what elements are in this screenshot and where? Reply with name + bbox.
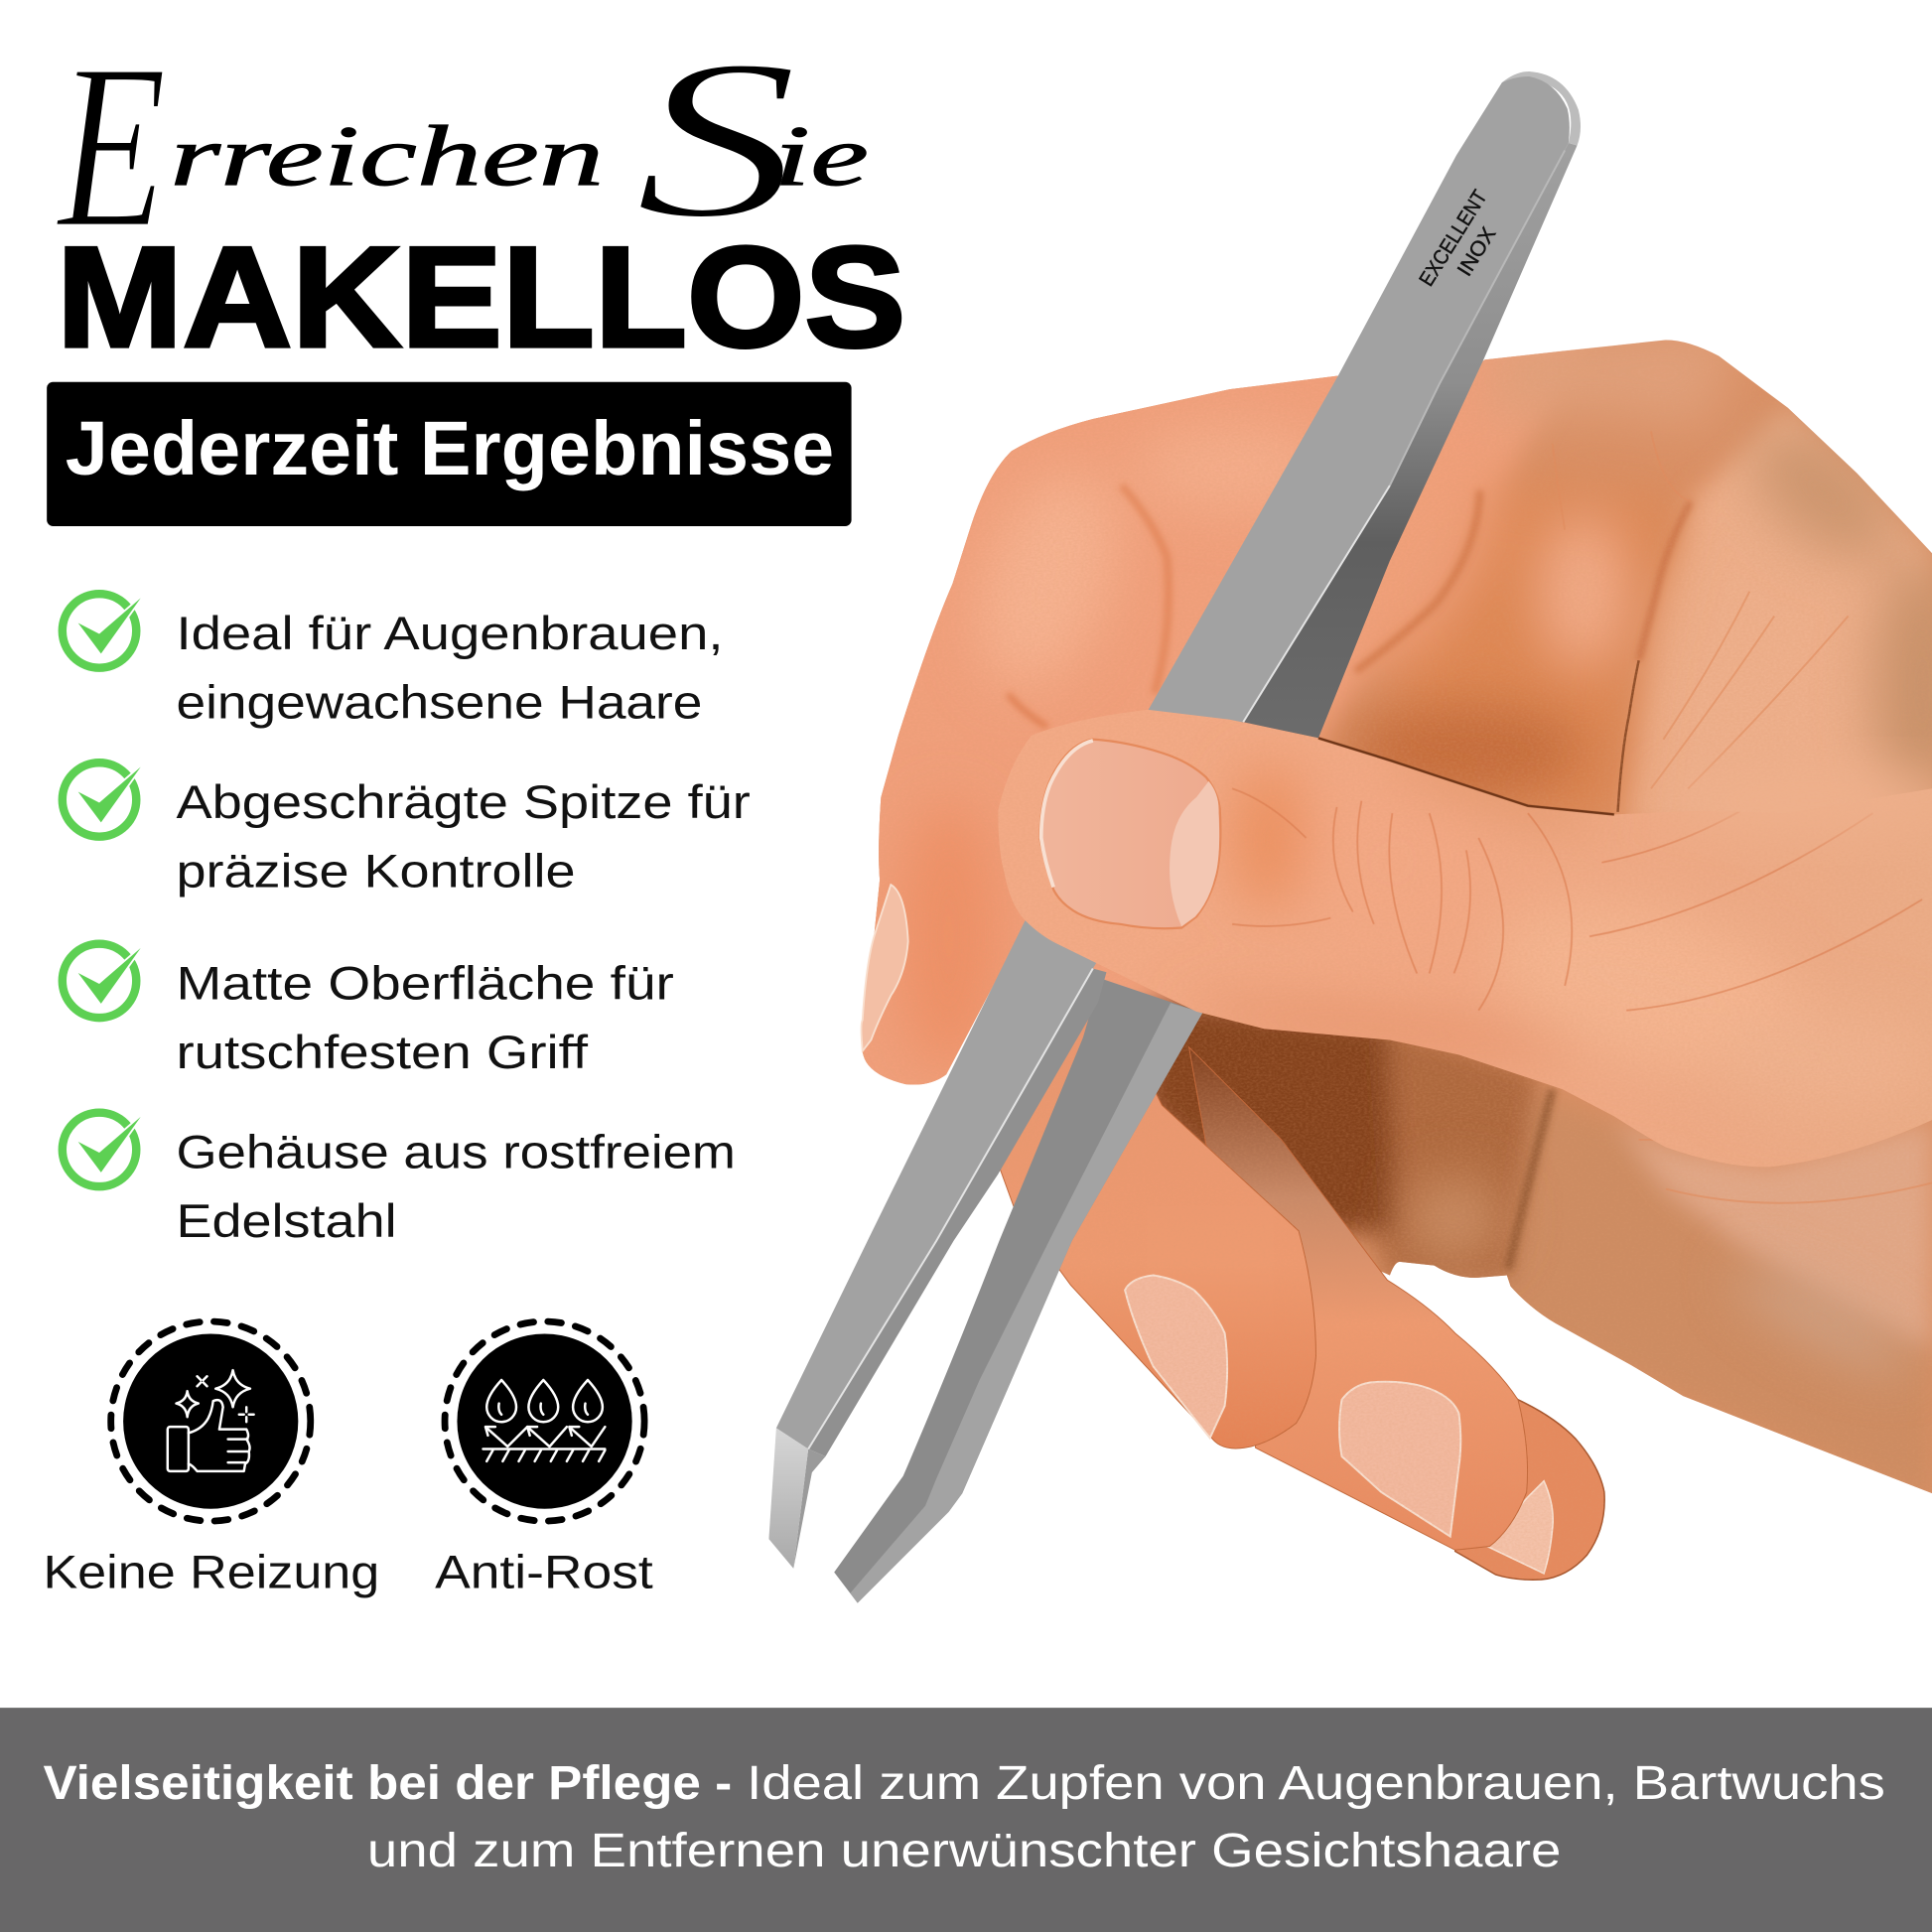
thumb upper shadow line <box>1318 738 1614 814</box>
icon: check <box>63 762 141 837</box>
label: Keine Reizung <box>43 1546 379 1598</box>
engraving: INOX <box>1453 223 1500 280</box>
banner: Jederzeit Ergebnisse: Jederzeit Ergebnisse <box>66 406 834 491</box>
icon: check <box>63 1113 141 1186</box>
title: script line <box>56 12 869 277</box>
pinky finger <box>1455 1361 1604 1580</box>
title: MAKELLOS: MAKELLOS <box>57 217 905 377</box>
footer band: Ideal zum Zupfen von Augenbrauen, Bartwuchs <box>747 1756 1885 1810</box>
middle nail <box>1125 1276 1227 1438</box>
icon: check <box>63 944 141 1018</box>
icon: index fingernail <box>862 885 908 1051</box>
bullet 4: Edelstahl <box>176 1194 397 1247</box>
icon: check <box>63 594 141 668</box>
ring nail <box>1339 1382 1460 1537</box>
title: script line: rreichen <box>170 108 604 204</box>
tweezer upper arm <box>768 71 1581 1569</box>
bullet 2: Abgeschrägte Spitze für <box>176 775 751 828</box>
footer band: und zum Entfernen unerwünschter Gesichtshaare <box>367 1824 1561 1877</box>
banner: Jederzeit Ergebnisse <box>47 382 852 526</box>
engraving: EXCELLENT <box>1415 187 1492 290</box>
bullet 2 <box>63 762 751 897</box>
badge: Keine Reizung <box>43 1321 379 1598</box>
footer band <box>0 1708 1932 1932</box>
photo: thumb <box>986 690 1932 1182</box>
bullet 3 <box>63 944 674 1078</box>
icon: thumbs up with sparkles <box>168 1370 254 1471</box>
bullet 3: rutschfesten Griff <box>176 1026 589 1078</box>
bullet 4: Gehäuse aus rostfreiem <box>176 1126 736 1178</box>
tweezers <box>768 71 1581 1603</box>
bullet 1: Ideal für Augenbrauen, <box>176 607 724 659</box>
bullet list <box>63 594 751 1247</box>
middle finger <box>1000 986 1315 1449</box>
badge: Anti-Rost <box>435 1321 653 1598</box>
tweezer lower arm <box>834 978 1202 1603</box>
title: script line: E <box>56 15 167 277</box>
thumb web blend <box>1663 768 1932 833</box>
bullet 4 <box>63 1113 736 1247</box>
pinky nail <box>1484 1481 1553 1574</box>
bullet 3: Matte Oberfläche für <box>176 957 674 1010</box>
icon: water drops on surface <box>483 1380 605 1461</box>
label: Anti-Rost <box>435 1546 653 1598</box>
bullet 2: präzise Kontrolle <box>176 845 576 897</box>
ring finger <box>1189 1047 1528 1550</box>
title: script line: S <box>634 12 798 265</box>
photo: ring and pinky fingers <box>1001 1021 1605 1581</box>
thumb nail <box>1039 740 1220 928</box>
photo: hand <box>801 308 1932 1516</box>
bullet 1: eingewachsene Haare <box>176 676 702 729</box>
title: script line: ie <box>773 108 869 204</box>
bullet 1 <box>63 594 724 729</box>
footer band: Vielseitigkeit bei der Pflege - <box>43 1756 732 1810</box>
skin texture <box>1125 1052 1604 1580</box>
